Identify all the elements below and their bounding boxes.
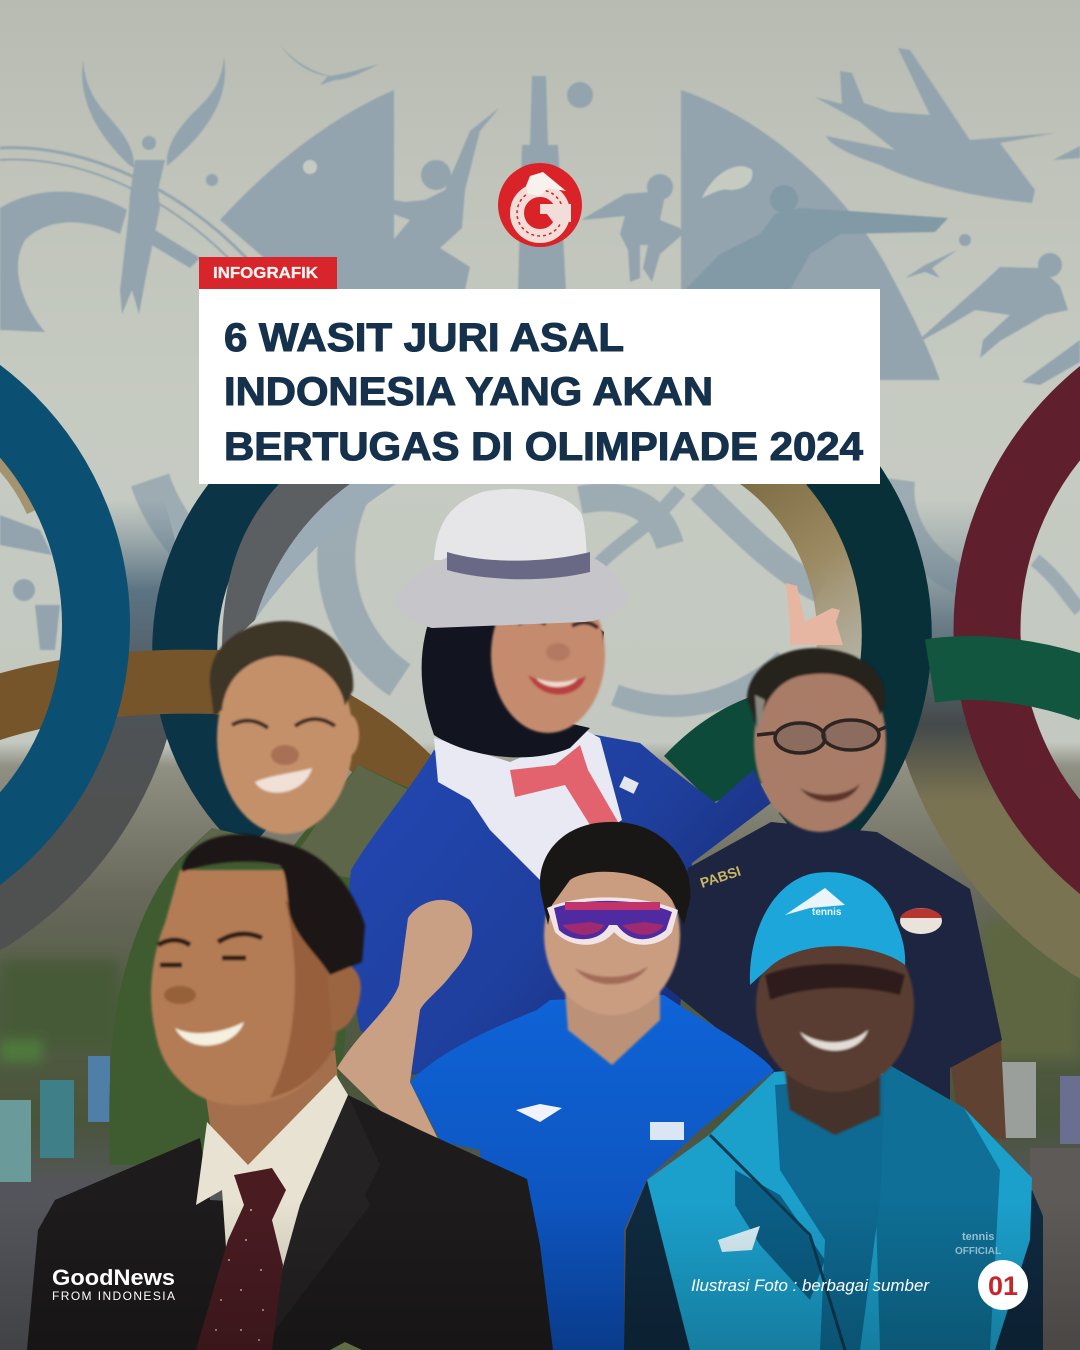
person: man in green jacket	[109, 621, 413, 1165]
shirt collar	[196, 1075, 348, 1270]
white shirt	[434, 730, 622, 880]
runner right	[912, 253, 1068, 358]
jacket logo: OFFICIAL	[955, 1246, 1001, 1257]
page number	[978, 1260, 1028, 1310]
title text: INDONESIA YANG AKAN	[224, 370, 713, 414]
tan arc top left	[0, 448, 36, 510]
hat	[393, 489, 628, 628]
pink scarf	[510, 745, 618, 825]
jumper	[581, 174, 683, 282]
brand: GoodNews from Indonesia: GoodNews	[52, 1265, 175, 1290]
olympic rings	[0, 257, 1080, 1003]
head	[151, 834, 365, 1105]
page number: 01	[988, 1271, 1018, 1301]
arm	[950, 1040, 1006, 1140]
shirt logos	[516, 1104, 562, 1122]
red ring	[987, 325, 1080, 935]
person: man with glasses in navy shirt	[664, 648, 1006, 1140]
ball	[567, 82, 593, 108]
neck and face	[756, 918, 914, 1135]
grey inner band	[222, 484, 350, 650]
shirt	[664, 822, 1002, 1110]
left quadrant	[220, 90, 394, 290]
red ring shadow	[919, 257, 1080, 1003]
winged figure	[82, 57, 225, 314]
jacket right panel	[875, 1062, 1000, 1350]
face	[210, 621, 359, 834]
person: blue shirt with sunglasses and raised fist	[337, 822, 774, 1350]
lapels	[260, 1095, 380, 1350]
tag: INFOGRAFIK: INFOGRAFIK	[213, 265, 318, 282]
curly hair	[540, 822, 690, 925]
shirt badge: PABSI	[698, 863, 743, 891]
title text: BERTUGAS DI OLIMPIADE 2024	[224, 425, 864, 469]
ground shading	[0, 920, 1080, 1062]
green ring left arc	[664, 697, 770, 803]
cap logo	[785, 888, 845, 918]
translucent inner band	[255, 484, 396, 620]
figures inside left ring	[0, 515, 60, 650]
right quadrant	[681, 90, 940, 380]
right dark ring	[801, 462, 897, 840]
brand: GoodNews from Indonesia: FROM INDONESIA	[52, 1289, 175, 1303]
title text: 6 WASIT JURI ASAL	[224, 316, 624, 360]
background sports silhouettes	[0, 46, 1080, 706]
lapel pin	[619, 776, 639, 794]
neck and face	[544, 855, 680, 1065]
gold arc	[749, 462, 840, 655]
new balance logo	[718, 1226, 760, 1252]
person: man in black suit and tie	[27, 834, 553, 1350]
swirling bands below the title	[150, 480, 1080, 706]
cap logo: tennis	[812, 907, 842, 918]
neck	[205, 1050, 338, 1170]
inner shirt	[775, 1075, 885, 1350]
left swirl band	[0, 192, 127, 332]
zipper	[710, 1135, 845, 1350]
raised hand	[786, 583, 843, 645]
blue ring shadow	[0, 273, 157, 977]
photo credit: Ilustrasi Foto : berbagai sumber	[691, 1276, 930, 1295]
plane	[815, 48, 1055, 203]
blue ring	[0, 334, 96, 916]
dot	[206, 174, 218, 186]
sunglasses	[547, 897, 678, 945]
tower	[518, 76, 566, 290]
suit	[27, 1095, 553, 1350]
tag: INFOGRAFIK	[199, 257, 337, 289]
title panel	[199, 289, 880, 484]
bottom darkening	[0, 1200, 1080, 1350]
light swoosh and ball highlights	[303, 160, 752, 198]
far-right figure	[1022, 146, 1080, 385]
left dark ring	[185, 470, 266, 830]
dark sleeves	[624, 1180, 700, 1350]
jacket logo	[955, 1231, 1001, 1257]
brand: GoodNews from Indonesia	[52, 1265, 175, 1303]
jacket	[647, 1062, 1032, 1350]
brown ring band	[0, 682, 420, 790]
footballer	[680, 185, 948, 295]
person: woman in cyan cap and jacket	[624, 872, 1043, 1350]
person: woman in white hat and blue blazer	[348, 489, 843, 1075]
arm	[337, 900, 472, 1145]
crowd and banners	[0, 1056, 1080, 1350]
logo: Garuda badge	[498, 163, 582, 247]
runner	[320, 108, 499, 290]
blazer	[348, 733, 771, 1075]
tie	[196, 1168, 286, 1350]
hijab	[422, 615, 590, 757]
pocket badge	[330, 1342, 362, 1350]
cap	[750, 872, 905, 985]
jacket logo: tennis	[962, 1231, 994, 1243]
jacket shade	[735, 1170, 825, 1300]
face	[747, 648, 886, 832]
title text	[224, 316, 864, 469]
small diver and ball	[905, 234, 971, 278]
blue polo	[410, 995, 774, 1350]
red emblem	[900, 908, 942, 934]
green ring band	[930, 668, 1080, 690]
bird	[281, 46, 379, 85]
glasses	[757, 720, 886, 753]
face	[491, 577, 605, 733]
